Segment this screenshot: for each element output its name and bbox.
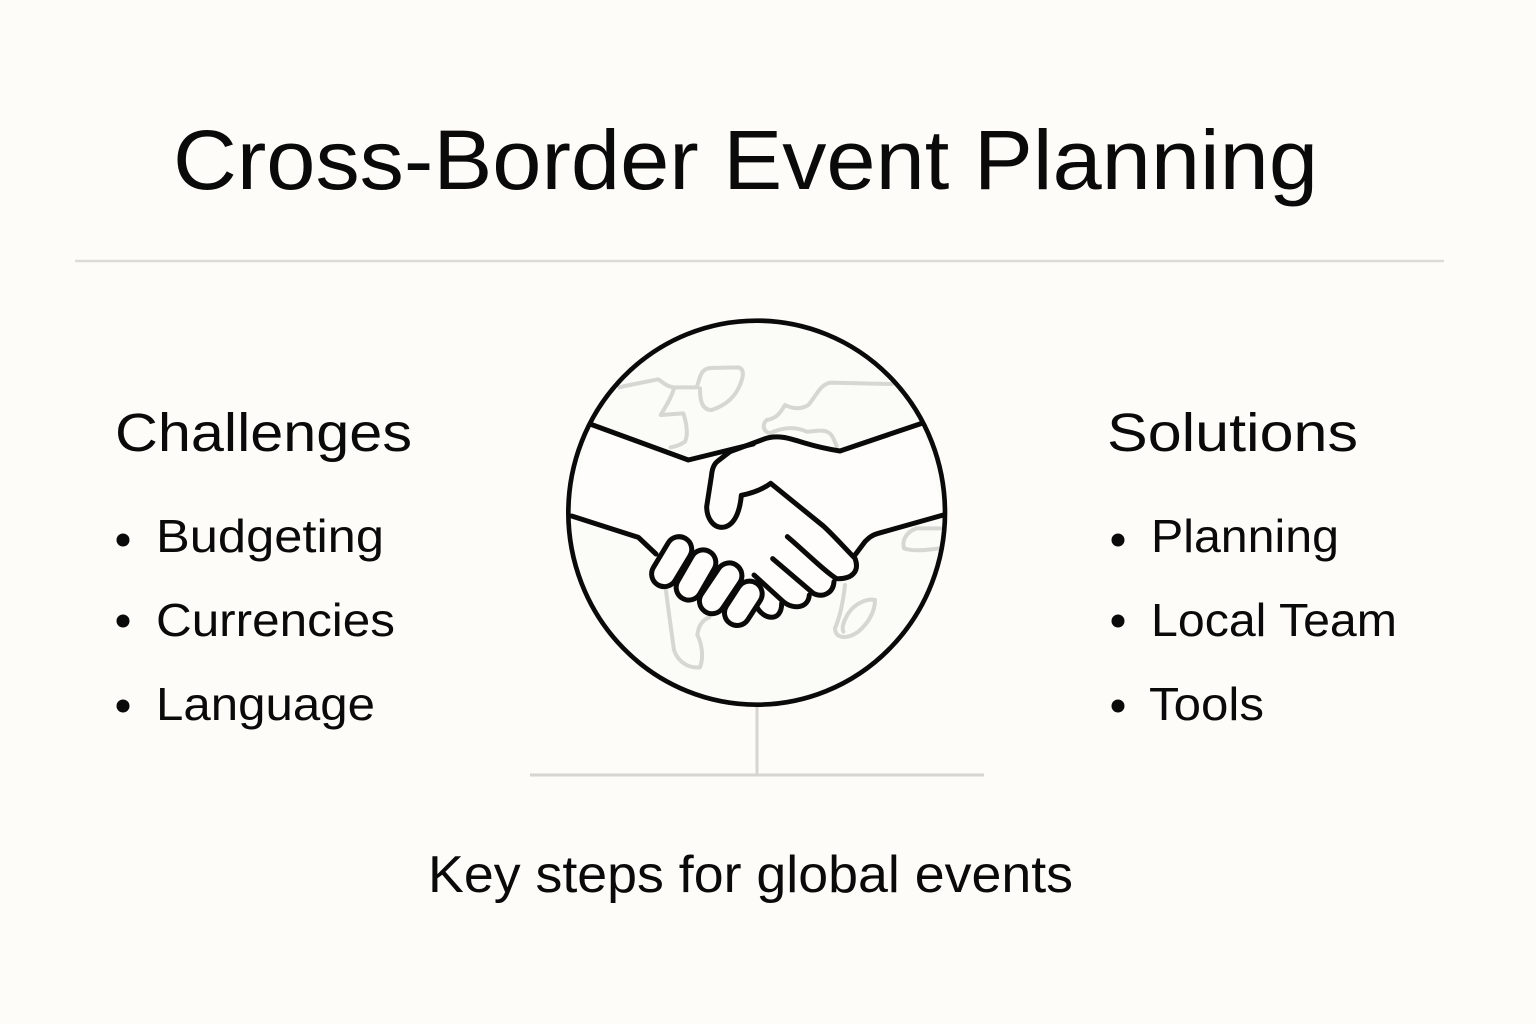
icon: globe with handshake (568, 321, 945, 705)
panel: solutions (1107, 403, 1397, 730)
heading: challenges: Challenges (115, 403, 412, 463)
list item: budgeting: Budgeting (156, 510, 384, 562)
list item: local team: Local Team (1151, 594, 1397, 646)
fingers (647, 532, 767, 630)
panel: challenges (115, 403, 412, 730)
hands (572, 423, 943, 623)
caption: Key steps for global events (428, 846, 1073, 904)
globe outline (568, 321, 945, 705)
title: Cross-Border Event Planning (173, 113, 1318, 207)
list item: language: Language (156, 678, 375, 730)
heading: solutions: Solutions (1107, 403, 1358, 463)
list item: tools: Tools (1149, 678, 1264, 730)
map outlines (619, 367, 940, 667)
list item: currencies: Currencies (156, 594, 395, 646)
globe fill (568, 321, 945, 705)
list item: planning: Planning (1151, 510, 1339, 562)
connector stand below globe (530, 706, 984, 775)
handshake outline (572, 423, 943, 617)
